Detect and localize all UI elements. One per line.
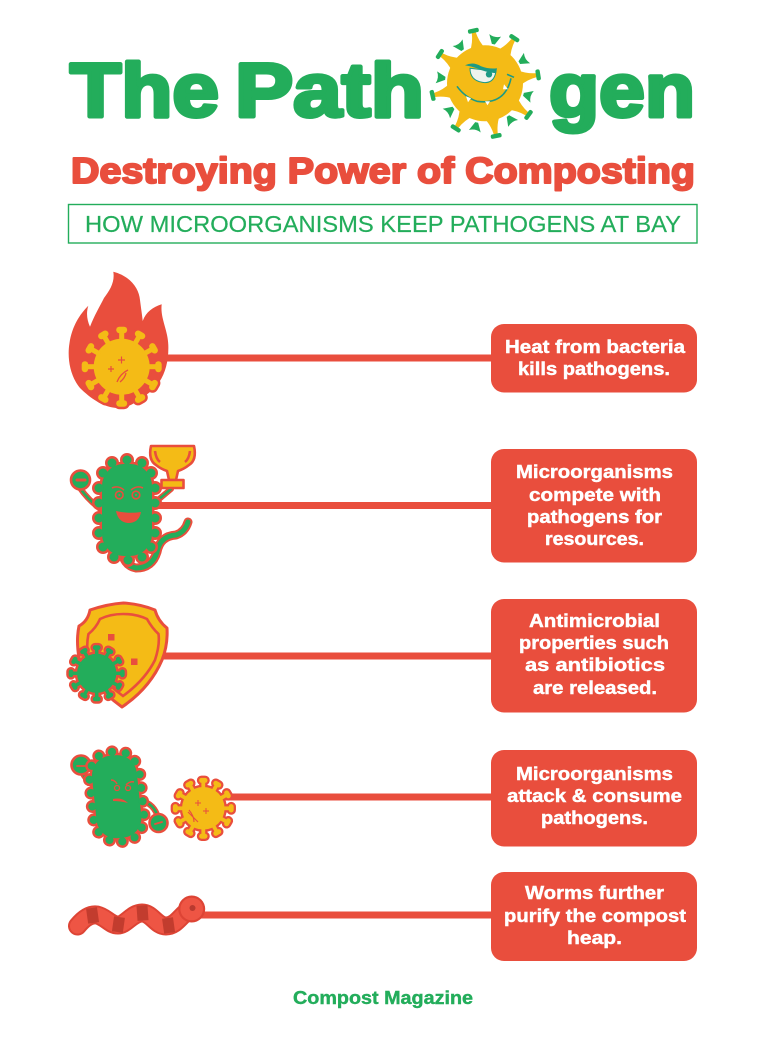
- text box: [491, 872, 697, 961]
- text box: pathogens.: [541, 808, 648, 828]
- text box: Worms further: [525, 883, 664, 903]
- text box: attack & consume: [507, 786, 682, 806]
- text box: [491, 449, 697, 562]
- text box: resources.: [545, 529, 644, 549]
- text box: Microorganisms: [516, 764, 673, 784]
- connector line: [160, 354, 495, 362]
- row 2: competition: [71, 446, 697, 568]
- text box: Heat from bacteria: [505, 337, 686, 357]
- row 1: heat: [69, 272, 697, 408]
- text box: pathogens for: [527, 507, 662, 527]
- text box: compete with: [529, 485, 661, 505]
- text box: are released.: [533, 678, 657, 698]
- row 4: attack: [72, 745, 697, 849]
- icon: cartoon virus forming the letter o: [429, 27, 541, 139]
- icon: bacterium attacking virus: [72, 745, 234, 849]
- icon: worm: [78, 896, 205, 934]
- text box: [491, 599, 697, 712]
- icon: virus in flame: [69, 272, 168, 408]
- connector line: [160, 652, 495, 660]
- subtitle banner: [68, 204, 697, 243]
- subtitle banner: HOW MICROORGANISMS KEEP PATHOGENS AT BAY: [85, 211, 681, 237]
- text box: Microorganisms: [516, 462, 673, 482]
- title: The Pathogen: The: [70, 48, 219, 134]
- connector line: [222, 794, 495, 800]
- icon: trophy: [150, 446, 195, 488]
- subtitle: Destroying Power of Composting: [71, 150, 695, 191]
- row 3: antimicrobial: [69, 599, 697, 712]
- footer: Compost Magazine: Compost Magazine: [293, 988, 473, 1008]
- connector line: [155, 502, 495, 509]
- text box: properties such: [519, 633, 669, 653]
- icon: bacterium with trophy: [71, 446, 195, 568]
- text box: [491, 750, 697, 846]
- row 5: worms: [78, 872, 697, 961]
- text box: heap.: [567, 928, 622, 948]
- icon: shield and green virus: [69, 603, 167, 707]
- connector line: [198, 912, 495, 918]
- text box: kills pathogens.: [518, 359, 670, 379]
- title: The Pathogen: gen: [549, 48, 695, 134]
- text box: purify the compost: [504, 906, 686, 926]
- title: The Pathogen: Path: [235, 48, 424, 134]
- text box: Antimicrobial: [529, 611, 660, 631]
- text box: as antibiotics: [525, 655, 665, 675]
- title: The Pathogen: [70, 48, 695, 134]
- text box: [491, 324, 697, 392]
